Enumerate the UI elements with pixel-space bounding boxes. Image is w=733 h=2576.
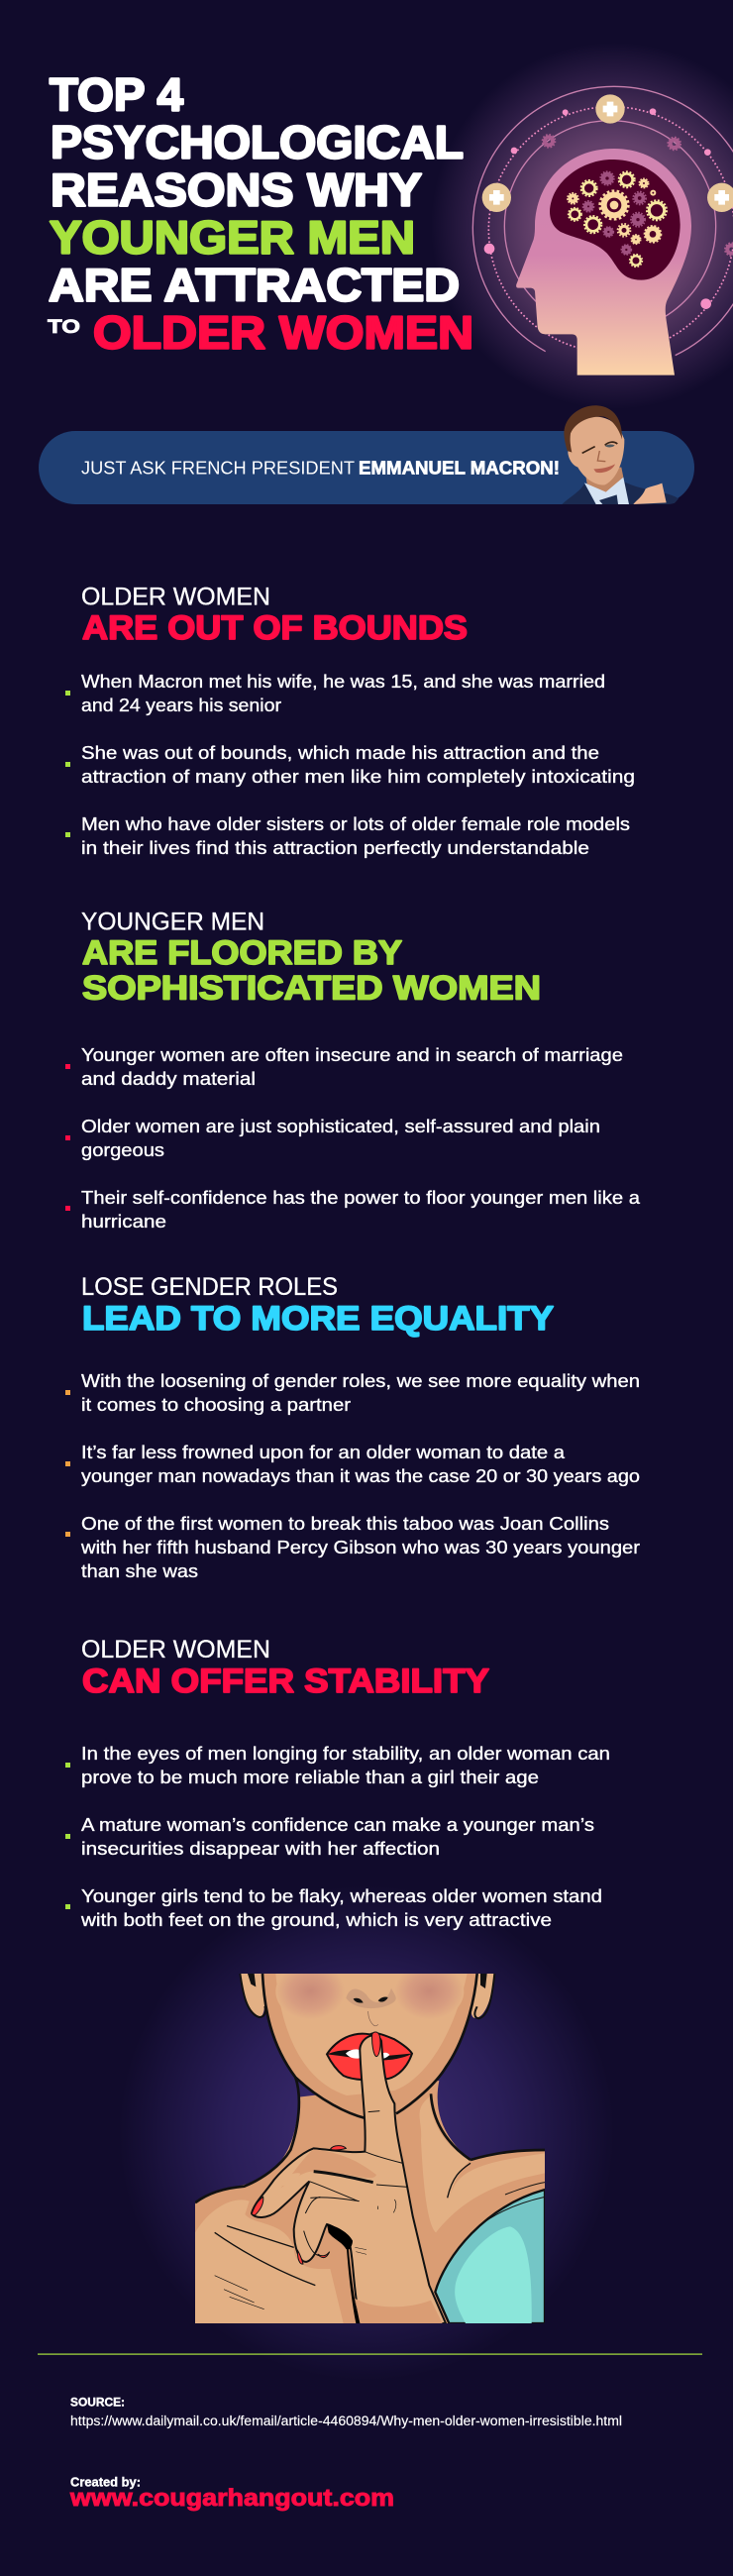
- heading: CAN OFFER STABILITY: [82, 1663, 489, 1700]
- heading: ARE FLOORED BY: [82, 934, 402, 972]
- heading: LEAD TO MORE EQUALITY: [82, 1300, 554, 1338]
- bullet 2: younger man nowadays than it was the case 20 or 30 years ago: [81, 1465, 640, 1486]
- bullet 2: [65, 1442, 640, 1486]
- heading: OLDER WOMEN: [81, 583, 270, 610]
- heading: ARE OUT OF BOUNDS: [82, 609, 468, 647]
- bullet 3: [65, 1885, 602, 1930]
- title: REASONS WHY: [51, 164, 422, 216]
- heading: [81, 1636, 489, 1700]
- bullet 2: It’s far less frowned upon for an older woman to date a: [81, 1442, 566, 1462]
- bullet 1: and daddy material: [81, 1068, 256, 1089]
- bullet 2: [65, 1814, 594, 1859]
- bullet 2: attraction of many other men like him completely intoxicating: [81, 766, 635, 787]
- panel: sophisticated women: [65, 908, 641, 1232]
- bullet 3: [65, 813, 630, 858]
- banner text: [81, 458, 560, 478]
- bullet 3: [65, 1513, 640, 1581]
- heading: [81, 1273, 554, 1338]
- bullet 1: Younger women are often insecure and in search of marriage: [81, 1044, 623, 1065]
- bullet 3: Men who have older sisters or lots of older female role models: [81, 813, 630, 834]
- bullet 3: hurricane: [81, 1211, 166, 1232]
- bullet 2: She was out of bounds, which made his attraction and the: [81, 742, 599, 763]
- bullet 1: [65, 1370, 640, 1415]
- bullet 1: When Macron met his wife, he was 15, and she was married: [81, 671, 605, 692]
- heading: YOUNGER MEN: [81, 908, 264, 935]
- bullet 2: A mature woman’s confidence can make a younger man’s: [81, 1814, 594, 1835]
- title: ARE ATTRACTED: [49, 260, 460, 311]
- source: SOURCE:: [70, 2398, 125, 2410]
- bullet 3: with her fifth husband Percy Gibson who was 30 years younger: [80, 1537, 640, 1557]
- bullet 1: [65, 1044, 623, 1089]
- bullet 3: than she was: [81, 1560, 198, 1581]
- bullet 1: [65, 1743, 610, 1787]
- credit: Created by:: [70, 2475, 141, 2489]
- heading: [81, 583, 468, 647]
- bullet 1: and 24 years his senior: [81, 695, 281, 715]
- title: [48, 69, 473, 359]
- bullet 2: Older women are just sophisticated, self-assured and plain: [81, 1116, 600, 1136]
- bullet 2: insecurities disappear with her affection: [81, 1838, 440, 1859]
- heading: [81, 908, 541, 1007]
- title: YOUNGER MEN: [50, 212, 415, 264]
- panel: out of bounds: [65, 583, 635, 858]
- bullet 2: [65, 1116, 600, 1160]
- title: OLDER WOMEN: [93, 307, 473, 359]
- heading: OLDER WOMEN: [81, 1636, 270, 1664]
- bullet 2: gorgeous: [81, 1139, 164, 1160]
- bullet 3: Their self-confidence has the power to floor younger men like a: [81, 1187, 641, 1208]
- bullet 3: One of the first women to break this taboo was Joan Collins: [81, 1513, 609, 1534]
- panel: stability: [65, 1636, 610, 1930]
- glow behind woman: [119, 1885, 614, 2381]
- title: PSYCHOLOGICAL: [51, 117, 464, 168]
- bullet 3: with both feet on the ground, which is very attractive: [80, 1909, 552, 1930]
- illustration: head with gears: [472, 86, 733, 376]
- bullet 3: in their lives find this attraction perfectly understandable: [81, 837, 589, 858]
- bullet 3: Younger girls tend to be flaky, whereas older women stand: [81, 1885, 602, 1906]
- banner text: EMMANUEL MACRON!: [359, 458, 560, 478]
- glow behind head: [431, 43, 733, 409]
- bullet 1: prove to be much more reliable than a girl their age: [81, 1767, 539, 1787]
- title: TO: [48, 317, 80, 338]
- panel: equality: [65, 1273, 640, 1581]
- bullet 1: it comes to choosing a partner: [81, 1394, 351, 1415]
- heading: SOPHISTICATED WOMEN: [82, 969, 541, 1007]
- illustration: woman with finger on lips: [195, 1964, 545, 2323]
- heading: LOSE GENDER ROLES: [81, 1273, 338, 1301]
- callout: Macron banner: [39, 405, 694, 504]
- bullet 2: [65, 742, 635, 787]
- title: TOP 4: [50, 69, 183, 121]
- banner text: JUST ASK FRENCH PRESIDENT: [81, 458, 355, 478]
- divider: [38, 2354, 702, 2355]
- source: https://www.dailymail.co.uk/femail/article-4460894/Why-men-older-women-irresistible.html: [70, 2414, 622, 2428]
- source: [70, 2398, 622, 2428]
- bullet 1: [65, 671, 605, 715]
- portrait: Macron: [562, 405, 679, 504]
- credit: [69, 2475, 394, 2512]
- bullet 1: In the eyes of men longing for stability, an older woman can: [81, 1743, 610, 1764]
- bullet 1: With the loosening of gender roles, we see more equality when: [81, 1370, 640, 1391]
- credit: www.cougarhangout.com: [69, 2485, 394, 2512]
- bullet 3: [65, 1187, 641, 1232]
